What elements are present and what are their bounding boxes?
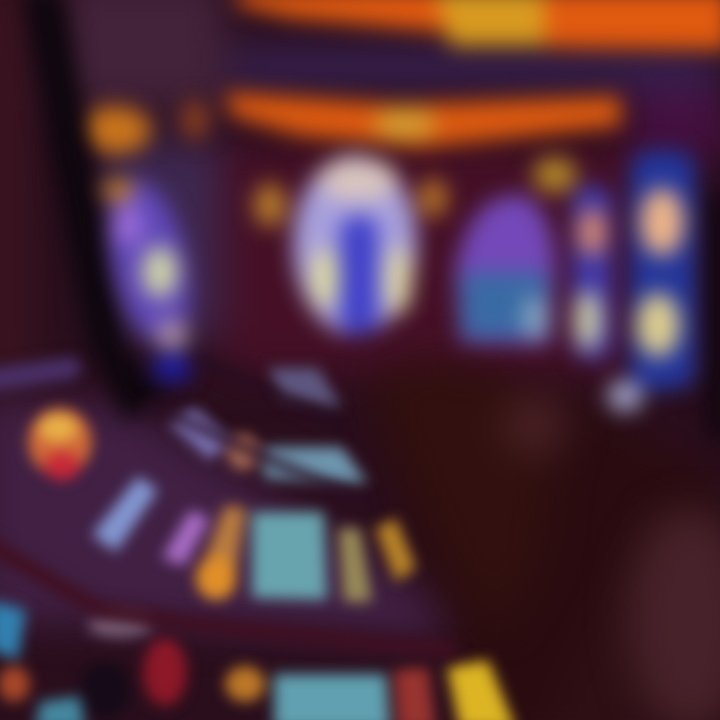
top orange light bands: [79, 0, 720, 154]
dark cabinet edge: [22, 0, 720, 450]
bottom row buttons: [0, 600, 516, 720]
panel dividers: [0, 360, 450, 650]
centre slot machine screen: [254, 155, 448, 335]
button panel lights: [28, 368, 416, 602]
left slot machine screen: [97, 172, 203, 382]
right slot machine screens: [455, 150, 696, 412]
hand silhouette: [370, 360, 720, 720]
